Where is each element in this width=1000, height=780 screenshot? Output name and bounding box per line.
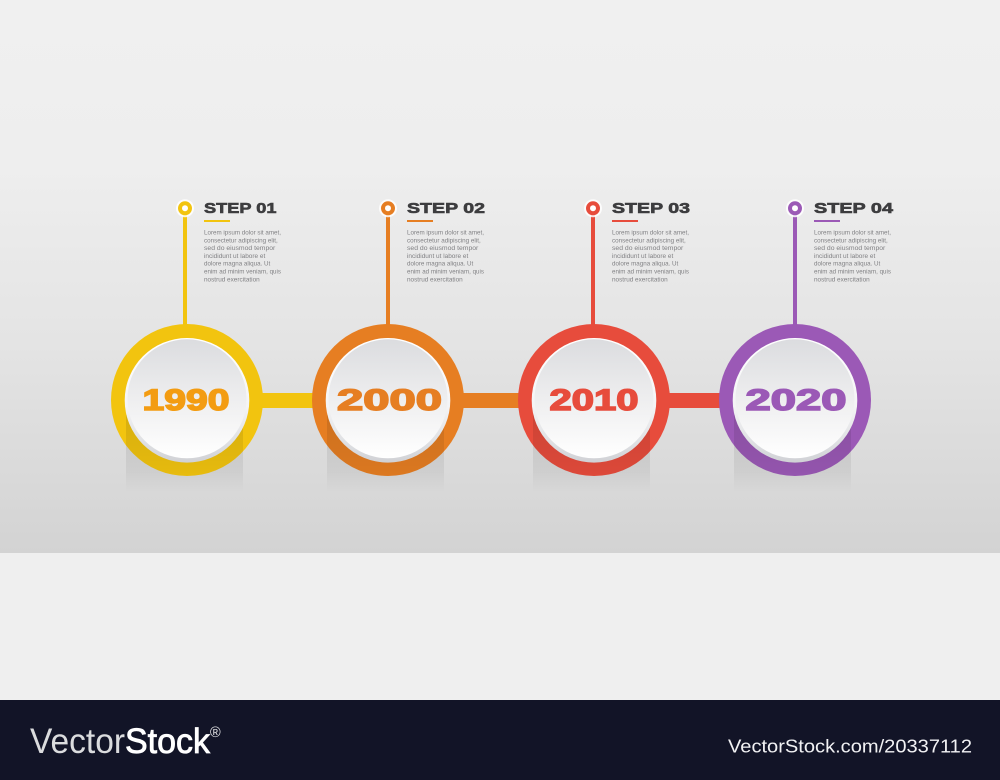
logo word: Vector: Vector	[30, 722, 125, 761]
step 02 milestone	[312, 199, 485, 492]
step 02 heading: STEP 02	[407, 201, 485, 217]
step 01 milestone	[111, 199, 282, 492]
footer logo	[30, 722, 210, 761]
2010 ring	[518, 324, 670, 476]
stem and pin 04	[786, 199, 804, 326]
connector: 1990 to 2000	[255, 393, 320, 408]
2000 label: 2000	[337, 384, 442, 417]
2000 ring	[312, 324, 464, 476]
step 01 text: Lorem ipsum dolor sit amet,	[204, 230, 281, 236]
step 02 text: incididunt ut labore et	[407, 253, 468, 260]
step 01 text: nostrud exercitation	[204, 276, 260, 283]
step 02 text: dolore magna aliqua. Ut	[407, 261, 473, 268]
step 04 text	[814, 230, 892, 283]
step 02 text: sed do eiusmod tempor	[407, 245, 479, 252]
2010 disc	[532, 338, 656, 463]
registered mark: ®	[210, 725, 221, 741]
footer url: VectorStock.com/20337112	[728, 736, 972, 757]
step 03 heading: STEP 03	[612, 201, 690, 217]
1990 disc	[125, 338, 249, 463]
step 04 text: consectetur adipiscing elit,	[814, 237, 888, 244]
2010 shadow	[533, 415, 650, 492]
stem and pin 01	[176, 199, 194, 326]
2000 shadow	[327, 415, 444, 492]
step 04 text: nostrud exercitation	[814, 276, 870, 283]
logo word: Stock: Stock	[125, 722, 210, 761]
1990 ring	[111, 324, 263, 476]
step 04 text: incididunt ut labore et	[814, 253, 875, 260]
step 03 text: sed do eiusmod tempor	[612, 245, 684, 252]
timeline	[111, 199, 893, 492]
step 03 text: consectetur adipiscing elit,	[612, 237, 686, 244]
step 03 text	[612, 230, 690, 283]
step 02 text: Lorem ipsum dolor sit amet,	[407, 230, 484, 236]
step 01 text: dolore magna aliqua. Ut	[204, 261, 270, 268]
step 01 text: incididunt ut labore et	[204, 253, 265, 260]
step 04 text: Lorem ipsum dolor sit amet,	[814, 230, 891, 236]
step 03 underline	[612, 220, 638, 222]
step 01 heading: STEP 01	[204, 201, 276, 217]
2010 label: 2010	[550, 384, 638, 417]
footer bar	[0, 700, 1000, 780]
step 03 text: dolore magna aliqua. Ut	[612, 261, 678, 268]
step 04 underline	[814, 220, 840, 222]
2000 disc	[326, 338, 450, 463]
step 04 text: sed do eiusmod tempor	[814, 245, 886, 252]
step 04 text: dolore magna aliqua. Ut	[814, 261, 880, 268]
step 01 text: sed do eiusmod tempor	[204, 245, 276, 252]
step 01 underline	[204, 220, 230, 222]
stem and pin 02	[379, 199, 397, 326]
step 02 text: nostrud exercitation	[407, 276, 463, 283]
step 01 text: consectetur adipiscing elit,	[204, 237, 278, 244]
step 04 milestone	[719, 199, 893, 492]
connector: 2000 to 2010	[456, 393, 526, 408]
step 01 text: enim ad minim veniam, quis	[204, 268, 282, 276]
stem and pin 03	[584, 199, 602, 326]
step 04 text: enim ad minim veniam, quis	[814, 268, 892, 276]
1990 label: 1990	[142, 384, 230, 417]
step 02 text	[407, 230, 485, 283]
2020 shadow	[734, 415, 851, 492]
step 03 milestone	[518, 199, 690, 492]
step 02 text: enim ad minim veniam, quis	[407, 268, 485, 276]
2020 label: 2020	[746, 384, 846, 417]
step 03 text: nostrud exercitation	[612, 276, 668, 283]
1990 shadow	[126, 415, 243, 492]
step 02 underline	[407, 220, 433, 222]
connector: 2010 to 2020	[662, 393, 727, 408]
step 01 text	[204, 230, 282, 283]
2020 ring	[719, 324, 871, 476]
step 03 text: incididunt ut labore et	[612, 253, 673, 260]
step 02 text: consectetur adipiscing elit,	[407, 237, 481, 244]
background panel	[0, 0, 1000, 553]
2020 disc	[733, 338, 857, 463]
step 04 heading: STEP 04	[814, 201, 893, 217]
step 03 text: enim ad minim veniam, quis	[612, 268, 690, 276]
step 03 text: Lorem ipsum dolor sit amet,	[612, 230, 689, 236]
